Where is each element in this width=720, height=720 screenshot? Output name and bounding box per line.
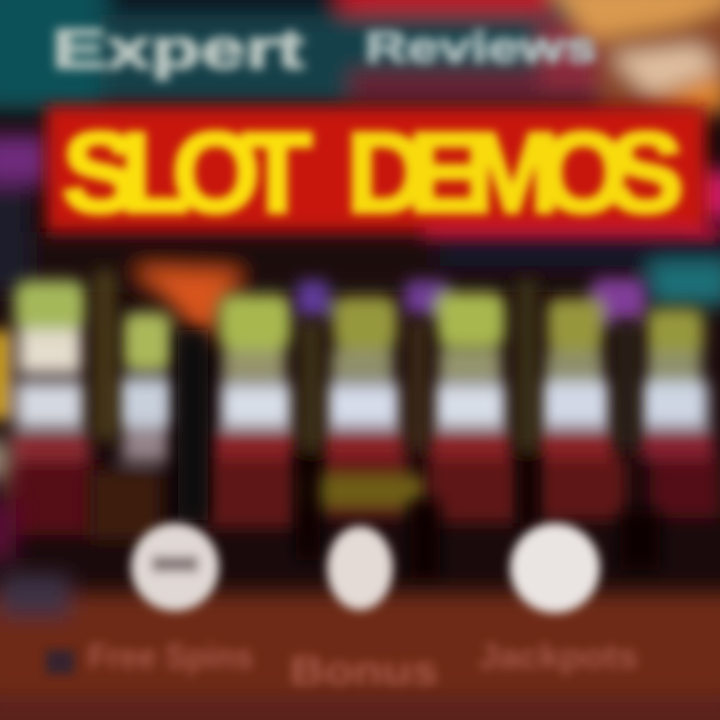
machine dividers <box>94 270 660 580</box>
floor <box>0 440 720 720</box>
circular badge: left <box>131 523 219 611</box>
top sign title: Expert <box>52 17 304 80</box>
circular badge: centre <box>327 526 393 610</box>
machine 2 <box>90 312 172 540</box>
caption: centre: Bonus <box>290 649 438 693</box>
small caption marker <box>46 650 74 674</box>
caption: right: Jackpots <box>478 638 638 676</box>
banner heading: SLOT <box>62 110 312 237</box>
machine 3 <box>208 294 298 528</box>
banner heading <box>62 110 684 237</box>
machine 7 <box>638 308 720 518</box>
floor captions <box>88 638 638 693</box>
top sign background <box>0 0 720 115</box>
top sign title <box>52 17 597 80</box>
red banner <box>46 106 720 240</box>
caption: left: Free Spins <box>88 638 253 676</box>
row of slot machines <box>0 278 720 540</box>
banner heading: DEMOS <box>346 110 684 237</box>
machine 1 <box>0 280 94 535</box>
machine 6 <box>536 278 646 520</box>
circular badge: right <box>510 523 600 613</box>
machine 5 <box>404 280 518 523</box>
lower dark backdrop <box>0 135 720 345</box>
top sign title: Reviews <box>365 23 597 72</box>
machine 4 <box>296 280 426 518</box>
